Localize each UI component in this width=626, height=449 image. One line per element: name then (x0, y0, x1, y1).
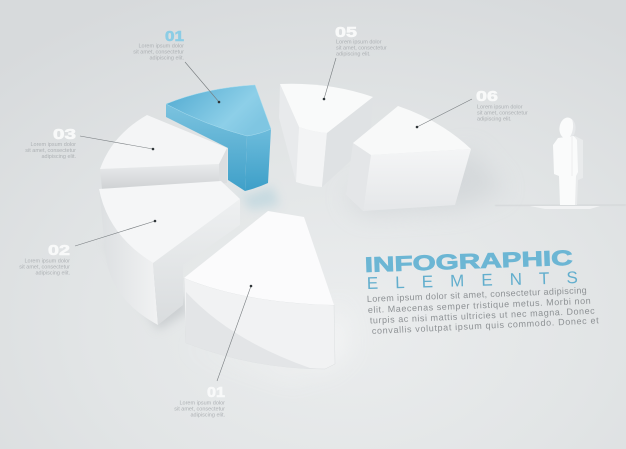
label 06: Lorem ipsum dolor (477, 104, 523, 110)
slice 02 right wall (153, 199, 240, 325)
label 01 bottom (174, 385, 225, 418)
callout leader lines (75, 58, 472, 381)
label 05: sit amet, consectetur (336, 46, 387, 52)
body paragraph: elit. Maecenas semper tristique metus. Morbi non (368, 296, 591, 315)
label 03: Lorem ipsum dolor (30, 142, 76, 148)
slice 02 top (99, 181, 240, 263)
slice 05 top (280, 84, 373, 133)
label 02: adipiscing elit. (35, 270, 70, 276)
title: infographic: INFOGRAPHIC (364, 247, 573, 277)
blue slice side wall (166, 104, 247, 191)
label 05: Lorem ipsum dolor (336, 40, 382, 46)
label 02: Lorem ipsum dolor (24, 258, 70, 264)
pie slice: 05 (279, 84, 373, 187)
callout dots (152, 98, 418, 287)
label 03: 03 (53, 127, 76, 143)
person shadow side (570, 136, 583, 205)
body paragraph (367, 285, 599, 336)
body paragraph: turpis ac nisi mattis ultricies ut nec magna. Donec (370, 306, 595, 325)
slice 05 left wall (279, 84, 299, 182)
body paragraph: convallis volutpat ipsum quis commodo. Donec et (372, 315, 599, 336)
label 05: adipiscing elit. (336, 52, 371, 58)
label 01 bottom: sit amet, consectetur (174, 406, 225, 412)
slice 06 left wall (346, 143, 371, 211)
large slice top (184, 211, 334, 305)
slice 02 outer wall (99, 189, 158, 325)
label 01 blue: adipiscing elit. (149, 56, 184, 62)
blue slice top (166, 85, 271, 136)
person body (553, 136, 578, 205)
title block (364, 247, 599, 336)
icon: standing person (495, 117, 626, 209)
label 01 blue (133, 28, 184, 62)
large slice wall shadow (186, 292, 325, 369)
label 06: 06 (476, 88, 498, 105)
slice 05 right wall (322, 97, 373, 187)
label 01 blue: 01 (165, 28, 184, 45)
blue slice front wall (245, 129, 271, 191)
label 01 blue: Lorem ipsum dolor (138, 44, 184, 50)
label 06 (476, 88, 528, 122)
label 02: 02 (48, 243, 70, 259)
label 01 bottom: adipiscing elit. (190, 412, 225, 418)
large slice front wall (184, 278, 335, 369)
label 03: sit amet, consectetur (25, 148, 76, 154)
body paragraph: Lorem ipsum dolor sit amet, consectetur adipiscing (367, 285, 587, 304)
slice 06 front wall (363, 149, 471, 211)
title: elements: ELEMENTS (367, 268, 578, 293)
label 03: adipiscing elit. (41, 154, 76, 160)
label 06: adipiscing elit. (477, 116, 512, 122)
label 02 (19, 243, 70, 276)
label 05 (335, 24, 387, 58)
label 02: sit amet, consectetur (19, 264, 70, 270)
label 01 bottom: Lorem ipsum dolor (179, 400, 225, 406)
label 01 blue: sit amet, consectetur (133, 50, 184, 56)
label 06: sit amet, consectetur (477, 110, 528, 116)
pie slice: 01 large (184, 211, 335, 369)
slice 03 top (100, 115, 227, 169)
pie slice: 06 (346, 106, 471, 211)
pie slice: blue 01 (166, 85, 271, 191)
slice 03 inner wall (219, 148, 227, 184)
slice 05 front wall (296, 127, 327, 187)
pie slice: 03 (100, 115, 227, 189)
floor shadows (104, 150, 505, 380)
slice 06 top (353, 106, 471, 155)
label 03 (25, 127, 76, 160)
label 01 bottom: 01 (207, 385, 225, 401)
person head (558, 117, 576, 139)
slice 03 front wall (100, 164, 219, 189)
pie slice: 02 (99, 181, 240, 325)
label 05: 05 (335, 24, 357, 41)
